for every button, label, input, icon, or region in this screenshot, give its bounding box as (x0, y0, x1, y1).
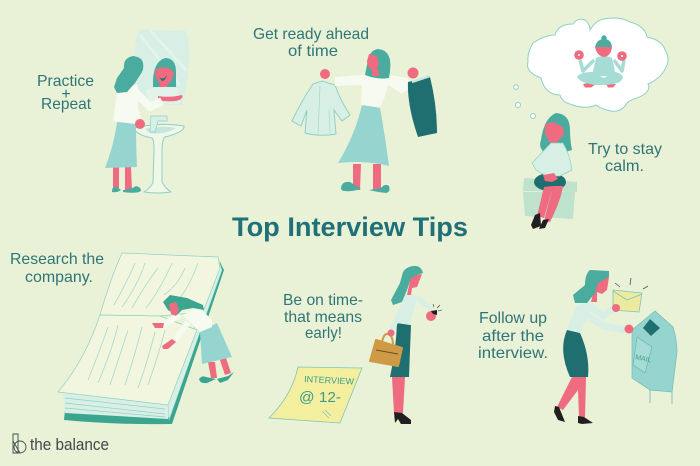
figure: woman turning page (152, 295, 234, 383)
panel: try to stay calm (514, 18, 668, 229)
panel: be on time (269, 266, 442, 424)
caption: be on time: Be on time- (283, 292, 363, 309)
caption: be on time: that means (284, 309, 362, 326)
caption: research (10, 251, 104, 286)
caption: be on time: early! (305, 325, 342, 342)
icon: seat box (523, 178, 577, 219)
icon: interview note (269, 367, 362, 423)
panel: research the company (10, 251, 234, 424)
icon: sink (134, 116, 184, 193)
caption: try to stay calm: Try to stay (588, 141, 662, 158)
icon: logo mark (13, 434, 26, 453)
caption: practice repeat: Practice (37, 73, 94, 90)
figure: seated woman (531, 113, 572, 229)
icon: thought cloud (528, 18, 668, 111)
figure: woman mailing letter (554, 270, 634, 424)
figure: woman checking watch (370, 266, 442, 424)
caption: follow up (478, 310, 548, 362)
caption: research: company. (25, 269, 93, 286)
caption: get ready (253, 26, 369, 60)
wordmark: the balance (30, 435, 109, 454)
caption: follow up: interview. (478, 345, 548, 362)
icon: mailbox: MAIL (635, 354, 652, 364)
icon: interview note: @ 12- (299, 389, 341, 406)
caption: follow up: after the (482, 328, 544, 345)
panel: follow up (478, 270, 677, 424)
caption: get ready: Get ready ahead (253, 26, 369, 43)
caption: get ready: of time (288, 43, 338, 60)
icon: dark skirt on hanger (408, 68, 437, 137)
caption: practice repeat: + (61, 86, 71, 103)
caption: practice repeat: Repeat (41, 96, 92, 113)
caption: practice repeat (37, 73, 94, 113)
caption: follow up: Follow up (479, 310, 547, 327)
panel: get ready ahead of time (253, 26, 437, 193)
icon: interview note: INTERVIEW (304, 374, 355, 387)
icon: envelope (613, 278, 648, 312)
icon: mirror with reflection (135, 29, 189, 105)
icon: mailbox (632, 311, 677, 404)
caption: try to stay calm (588, 141, 662, 175)
figure: woman at sink (105, 56, 162, 193)
title: Top Interview Tips (232, 212, 468, 242)
figure: woman holding clothes (335, 49, 411, 193)
caption: research: Research the (10, 251, 104, 268)
caption: try to stay calm: calm. (605, 158, 644, 175)
panel: practice and repeat (37, 29, 189, 193)
icon: meditating figure (574, 35, 627, 88)
icon: giant book (58, 253, 224, 424)
icon: shirt on hanger (292, 69, 350, 135)
icon: briefcase (370, 334, 402, 366)
icon: thought bubbles (514, 85, 536, 118)
caption: be on time (283, 292, 363, 342)
logo: the balance (13, 434, 109, 454)
